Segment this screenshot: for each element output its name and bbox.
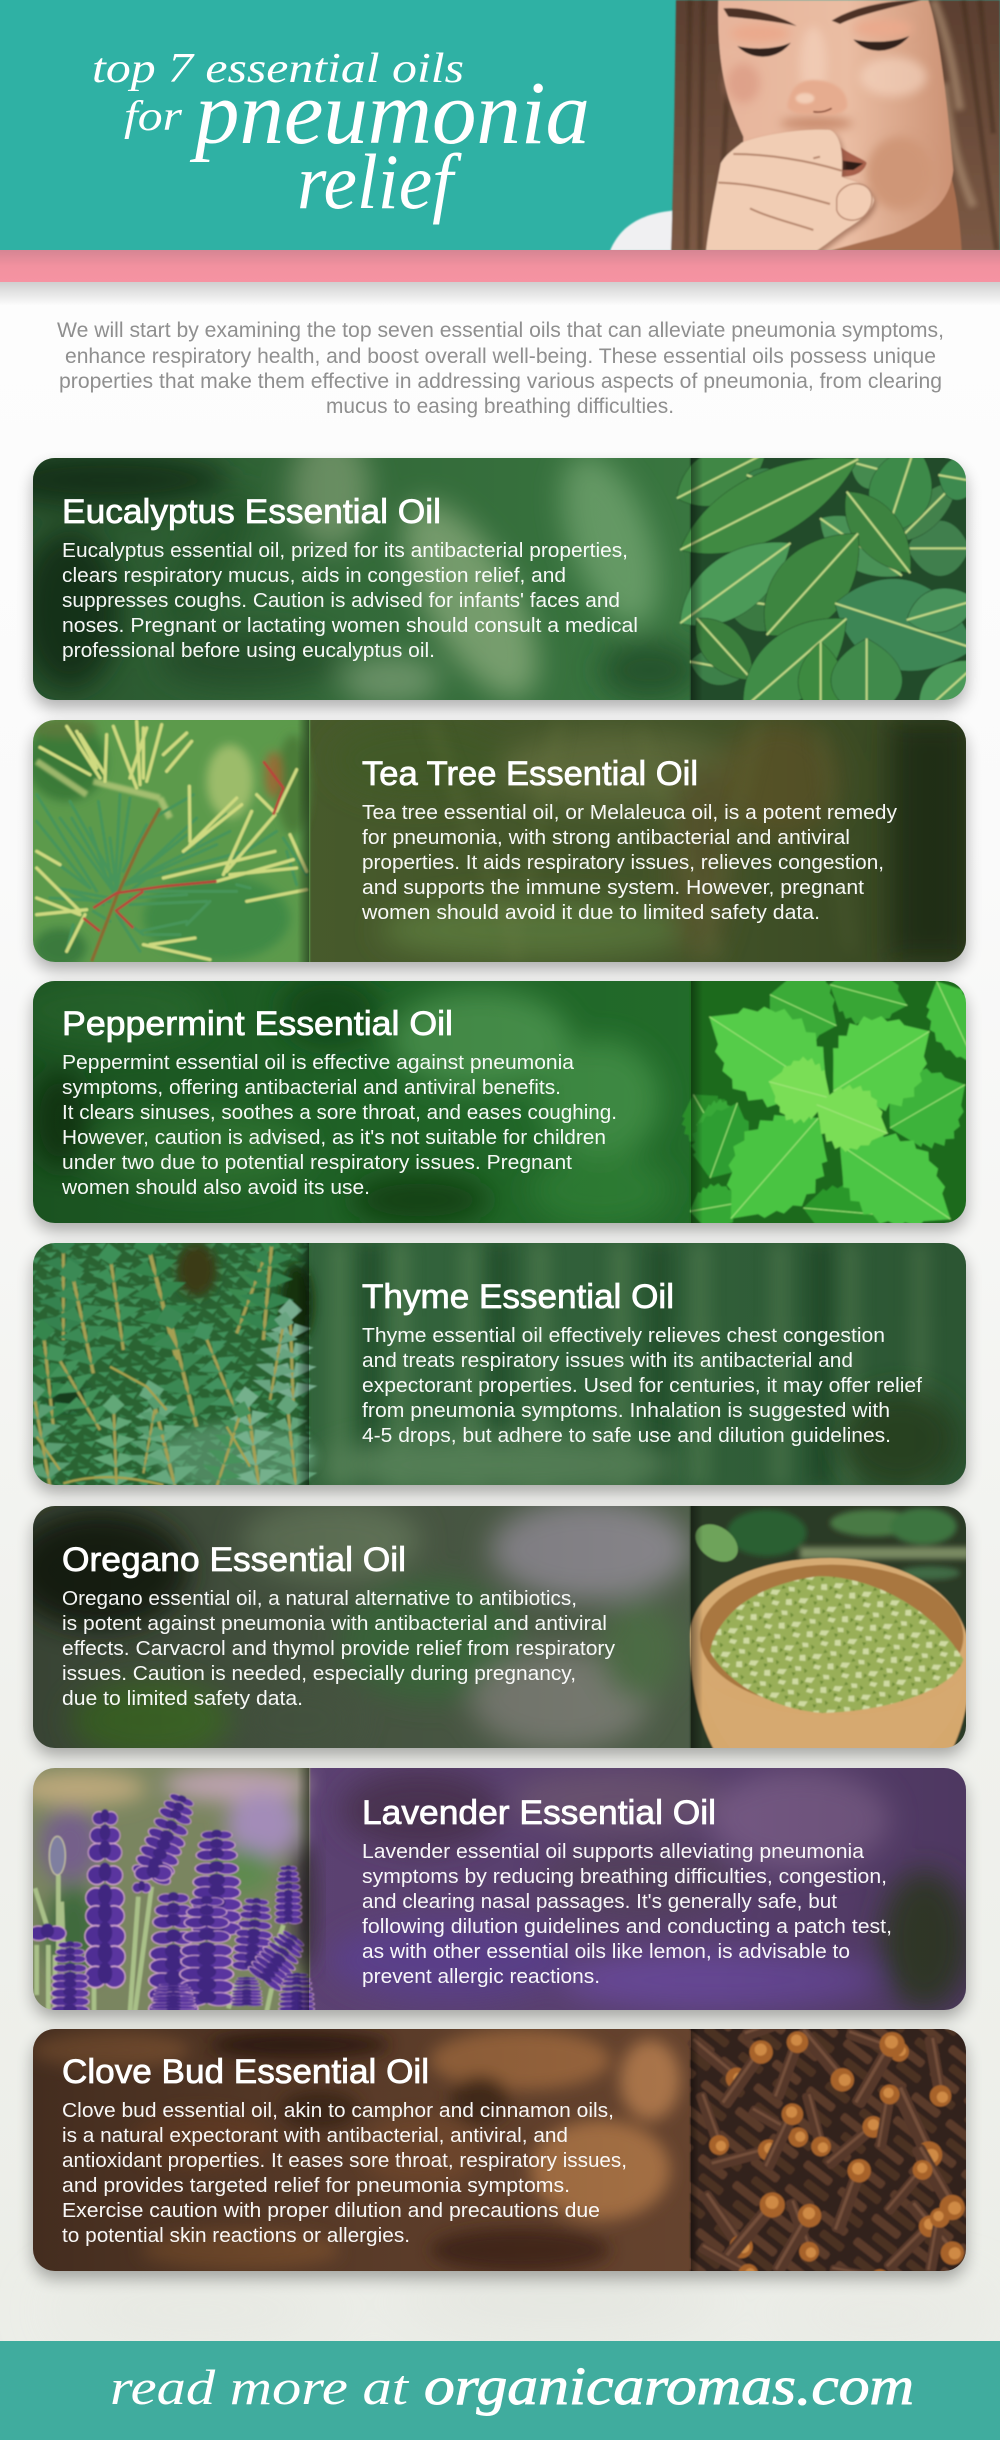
- body text: and provides targeted relief for pneumonia symptoms.: [62, 2175, 570, 2197]
- body text: women should avoid it due to limited safety data.: [361, 902, 820, 924]
- body text: symptoms, offering antibacterial and antiviral benefits.: [62, 1077, 561, 1099]
- heading: Peppermint Essential Oil: [62, 1005, 453, 1043]
- body text: for pneumonia, with strong antibacterial and antiviral: [362, 827, 850, 849]
- body text: However, caution is advised, as it's not suitable for children: [62, 1127, 606, 1149]
- body text: [362, 1841, 892, 1988]
- photo: clove buds: [683, 2001, 970, 2289]
- band shadow: [0, 282, 1000, 306]
- panel: clove bud: [30, 2001, 970, 2289]
- intro paragraph: [57, 319, 944, 418]
- body text: issues. Caution is needed, especially during pregnancy,: [62, 1663, 576, 1685]
- heading: Tea Tree Essential Oil: [362, 755, 698, 793]
- body text: is a natural expectorant with antibacterial, antiviral, and: [62, 2125, 568, 2147]
- body text: Exercise caution with proper dilution and precautions due: [62, 2200, 600, 2222]
- title: [92, 46, 590, 225]
- photo: oregano bowl: [688, 1503, 970, 1766]
- intro paragraph: We will start by examining the top seven essential oils that can alleviate pneumonia symptoms,: [57, 319, 944, 342]
- body text: is potent against pneumonia with antibacterial and antiviral: [62, 1613, 607, 1635]
- body text: to potential skin reactions or allergies.: [62, 2225, 410, 2247]
- body text: suppresses coughs. Caution is advised for infants' faces and: [62, 590, 620, 612]
- body text: professional before using eucalyptus oil.: [62, 640, 435, 662]
- image edge shade: [691, 2029, 699, 2271]
- photo: tea tree needles: [27, 718, 310, 971]
- heading: Lavender Essential Oil: [362, 1794, 716, 1832]
- body text: following dilution guidelines and conducting a patch test,: [362, 1916, 892, 1938]
- image edge shade: [297, 720, 309, 962]
- panel: peppermint: [10, 954, 1000, 1256]
- background: blurred needles: [305, 720, 970, 962]
- panel: lavender: [13, 1765, 970, 2018]
- footer call to action: read more at: [110, 2359, 409, 2415]
- body text: It clears sinuses, soothes a sore throat, and eases coughing.: [62, 1102, 617, 1124]
- body text: [62, 1588, 615, 1710]
- body text: [361, 802, 897, 924]
- body text: as with other essential oils like lemon, is advisable to: [362, 1941, 850, 1963]
- body text: [362, 1325, 922, 1447]
- heading: Clove Bud Essential Oil: [62, 2053, 429, 2091]
- title: for: [124, 94, 183, 140]
- body text: and clearing nasal passages. It's generally safe, but: [362, 1891, 837, 1913]
- body text: Eucalyptus essential oil, prized for its antibacterial properties,: [62, 540, 628, 562]
- panel: oregano: [10, 1500, 970, 1766]
- heading: Eucalyptus Essential Oil: [62, 493, 441, 531]
- background: blurred lavender: [305, 1768, 970, 2010]
- panel: thyme: [7, 1221, 966, 1500]
- background: blurred leaves: [33, 458, 691, 700]
- body text: Lavender essential oil supports alleviating pneumonia: [362, 1841, 865, 1863]
- body text: Oregano essential oil, a natural alternative to antibiotics,: [62, 1588, 577, 1610]
- body text: symptoms by reducing breathing difficulties, congestion,: [362, 1866, 887, 1888]
- title: pneumonia: [189, 64, 590, 163]
- image edge shade: [297, 1243, 309, 1485]
- body text: Tea tree essential oil, or Melaleuca oil, is a potent remedy: [362, 802, 897, 824]
- body text: from pneumonia symptoms. Inhalation is suggested with: [362, 1400, 890, 1422]
- body text: [61, 1052, 617, 1199]
- body text: under two due to potential respiratory issues. Pregnant: [62, 1152, 572, 1174]
- body text: 4-5 drops, but adhere to safe use and dilution guidelines.: [362, 1425, 891, 1447]
- background: blurred mint: [10, 974, 693, 1226]
- intro paragraph: enhance respiratory health, and boost overall well-being. These essential oils possess unique: [65, 345, 936, 368]
- heading: Oregano Essential Oil: [62, 1541, 406, 1579]
- body text: [62, 540, 638, 662]
- photo: eucalyptus leaves: [676, 458, 966, 700]
- body text: Peppermint essential oil is effective against pneumonia: [62, 1052, 575, 1074]
- intro paragraph: properties that make them effective in addressing various aspects of pneumonia, from clearing: [59, 370, 942, 393]
- body text: Clove bud essential oil, akin to camphor and cinnamon oils,: [62, 2100, 614, 2122]
- background: blurred cloves: [30, 2029, 693, 2272]
- footer banner: [0, 2341, 1000, 2440]
- title: relief: [297, 138, 462, 225]
- background: blurred thyme: [305, 1243, 966, 1495]
- body text: effects. Carvacrol and thymol provide relief from respiratory: [62, 1638, 615, 1660]
- photo: thyme sprigs: [7, 1221, 319, 1500]
- title: top 7 essential oils: [92, 46, 464, 92]
- image edge shade: [691, 458, 703, 700]
- body text: expectorant properties. Used for centuries, it may offer relief: [362, 1375, 922, 1397]
- image edge shade: [691, 1506, 703, 1748]
- body text: due to limited safety data.: [62, 1688, 303, 1710]
- footer call to action: organicaromas.com: [424, 2356, 914, 2416]
- body text: Thyme essential oil effectively relieves chest congestion: [362, 1325, 885, 1347]
- body text: noses. Pregnant or lactating women should consult a medical: [62, 615, 638, 637]
- panel: tea tree: [27, 718, 970, 971]
- intro paragraph: mucus to easing breathing difficulties.: [326, 395, 674, 418]
- header banner: [0, 0, 1000, 254]
- body text: women should also avoid its use.: [61, 1177, 370, 1199]
- photo: mint leaves: [669, 954, 1000, 1256]
- photo: woman coughing: [610, 0, 1000, 254]
- body text: and treats respiratory issues with its antibacterial and: [362, 1350, 853, 1372]
- body text: and supports the immune system. However, pregnant: [362, 877, 864, 899]
- image edge shade: [297, 1768, 309, 2010]
- body text: clears respiratory mucus, aids in congestion relief, and: [62, 565, 566, 587]
- photo: lavender flowers: [13, 1765, 317, 2018]
- body text: [62, 2100, 627, 2247]
- body text: prevent allergic reactions.: [362, 1966, 600, 1988]
- image edge shade: [691, 981, 703, 1223]
- body text: properties. It aids respiratory issues, relieves congestion,: [362, 852, 884, 874]
- body text: antioxidant properties. It eases sore throat, respiratory issues,: [62, 2150, 627, 2172]
- panel: eucalyptus: [24, 456, 976, 718]
- heading: Thyme Essential Oil: [362, 1278, 674, 1316]
- background: blurred oregano: [10, 1500, 693, 1760]
- pink band: [0, 250, 1000, 282]
